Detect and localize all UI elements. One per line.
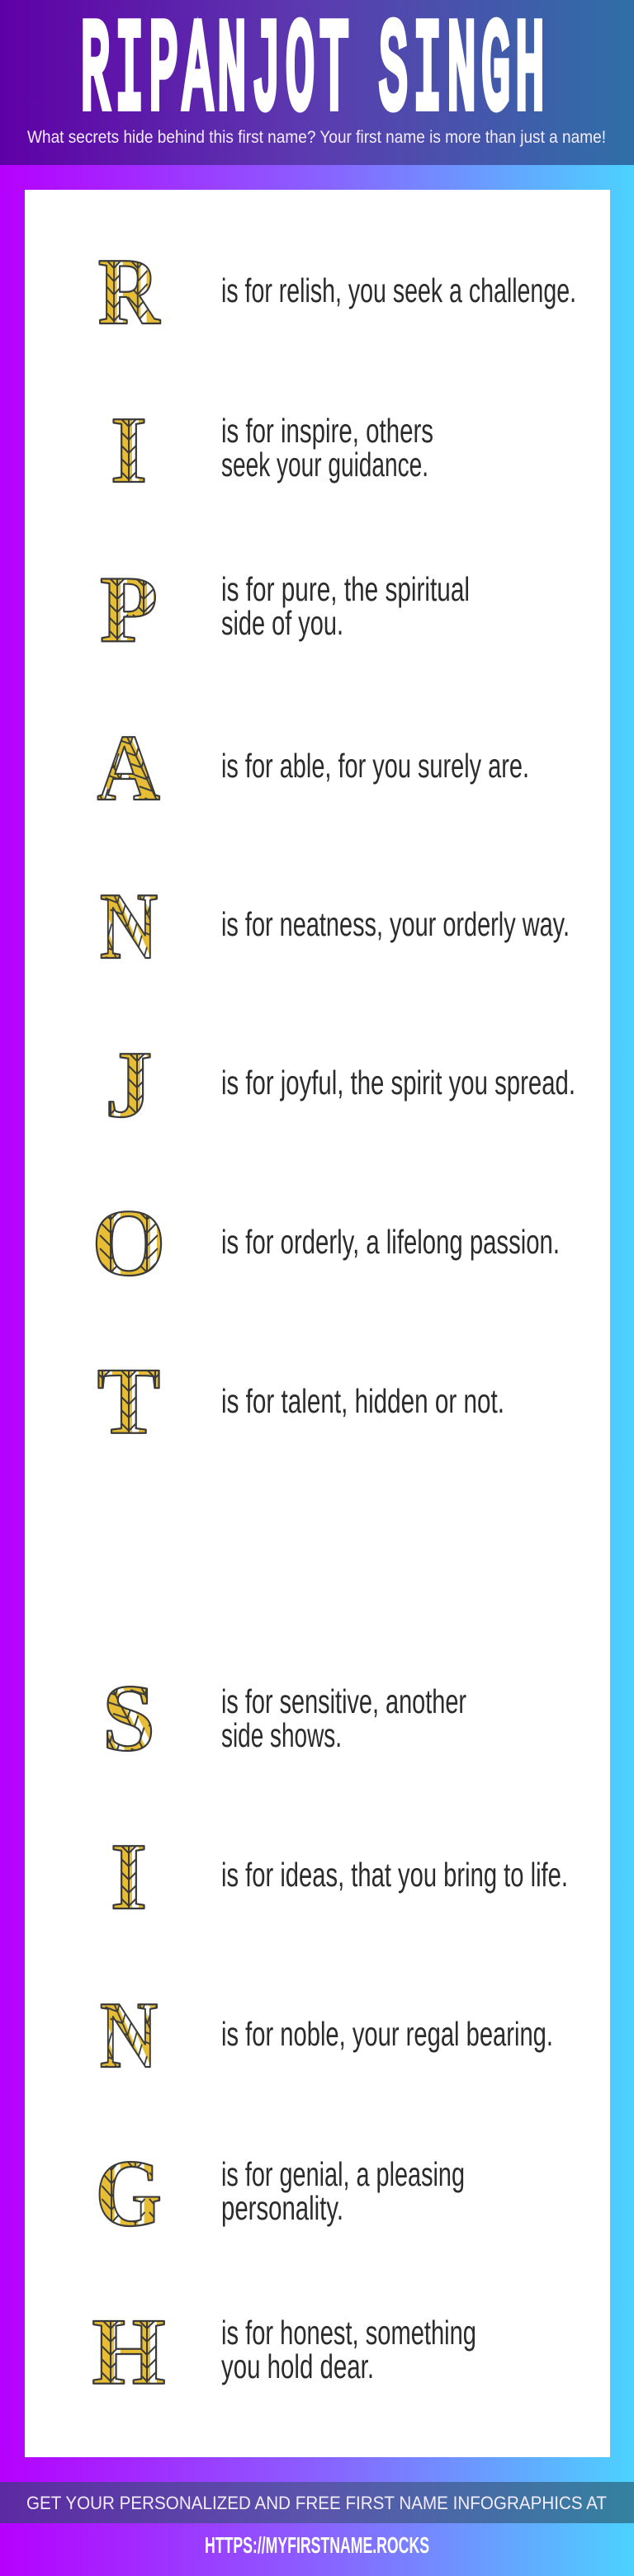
icon: letter N: N (100, 875, 158, 979)
row: I (111, 398, 433, 502)
text: I meaning: is for inspire, others (221, 412, 433, 450)
row: N (100, 875, 570, 979)
icon: letter T: T (97, 1349, 160, 1454)
row: R (98, 239, 576, 344)
row: T (97, 1349, 504, 1454)
header band (0, 0, 634, 165)
text: P meaning: is for pure, the spiritual (221, 570, 470, 608)
row: G (95, 2141, 465, 2246)
row: H (92, 2300, 476, 2404)
text: G meaning: is for genial, a pleasing (221, 2155, 465, 2193)
row: P: side of you. (221, 604, 343, 642)
icon: letter O: O (92, 1191, 166, 1295)
icon: letter N: N (100, 1984, 158, 2088)
icon: letter J: J (105, 1032, 153, 1137)
row: O (92, 1191, 560, 1295)
footer URL: HTTPS://MYFIRSTNAME.ROCKS (205, 2532, 429, 2558)
footer call to action: GET YOUR PERSONALIZED AND FREE FIRST NAME INFOGRAPHICS AT (26, 2493, 607, 2513)
row: N (second) (100, 1984, 553, 2088)
title: RIPANJOT (81, 2, 354, 144)
row: S: side shows. (221, 1716, 342, 1754)
icon: letter G: G (95, 2141, 162, 2246)
row: H: you hold dear. (221, 2347, 374, 2385)
title: SINGH (379, 2, 550, 144)
text: H meaning: is for honest, something (221, 2314, 476, 2352)
footer band (0, 2482, 634, 2523)
icon: letter H: H (92, 2300, 166, 2404)
icon: letter A: A (97, 715, 160, 820)
row: I (second) (111, 1824, 568, 1929)
icon: letter R: R (98, 239, 160, 344)
text: S meaning: is for sensitive, another (221, 1682, 466, 1720)
row: P (100, 557, 470, 662)
row: I: seek your guidance. (221, 446, 428, 484)
title (81, 2, 550, 144)
icon: letter I: I (111, 1824, 147, 1929)
icon: letter I: I (111, 398, 147, 502)
row: A (97, 715, 529, 820)
row: J (105, 1032, 575, 1137)
row: S (102, 1666, 466, 1771)
text: T meaning: is for talent, hidden or not. (221, 1382, 504, 1420)
row: G: personality. (221, 2189, 343, 2227)
icon: letter P: P (100, 557, 158, 662)
icon: letter S: S (102, 1666, 155, 1771)
